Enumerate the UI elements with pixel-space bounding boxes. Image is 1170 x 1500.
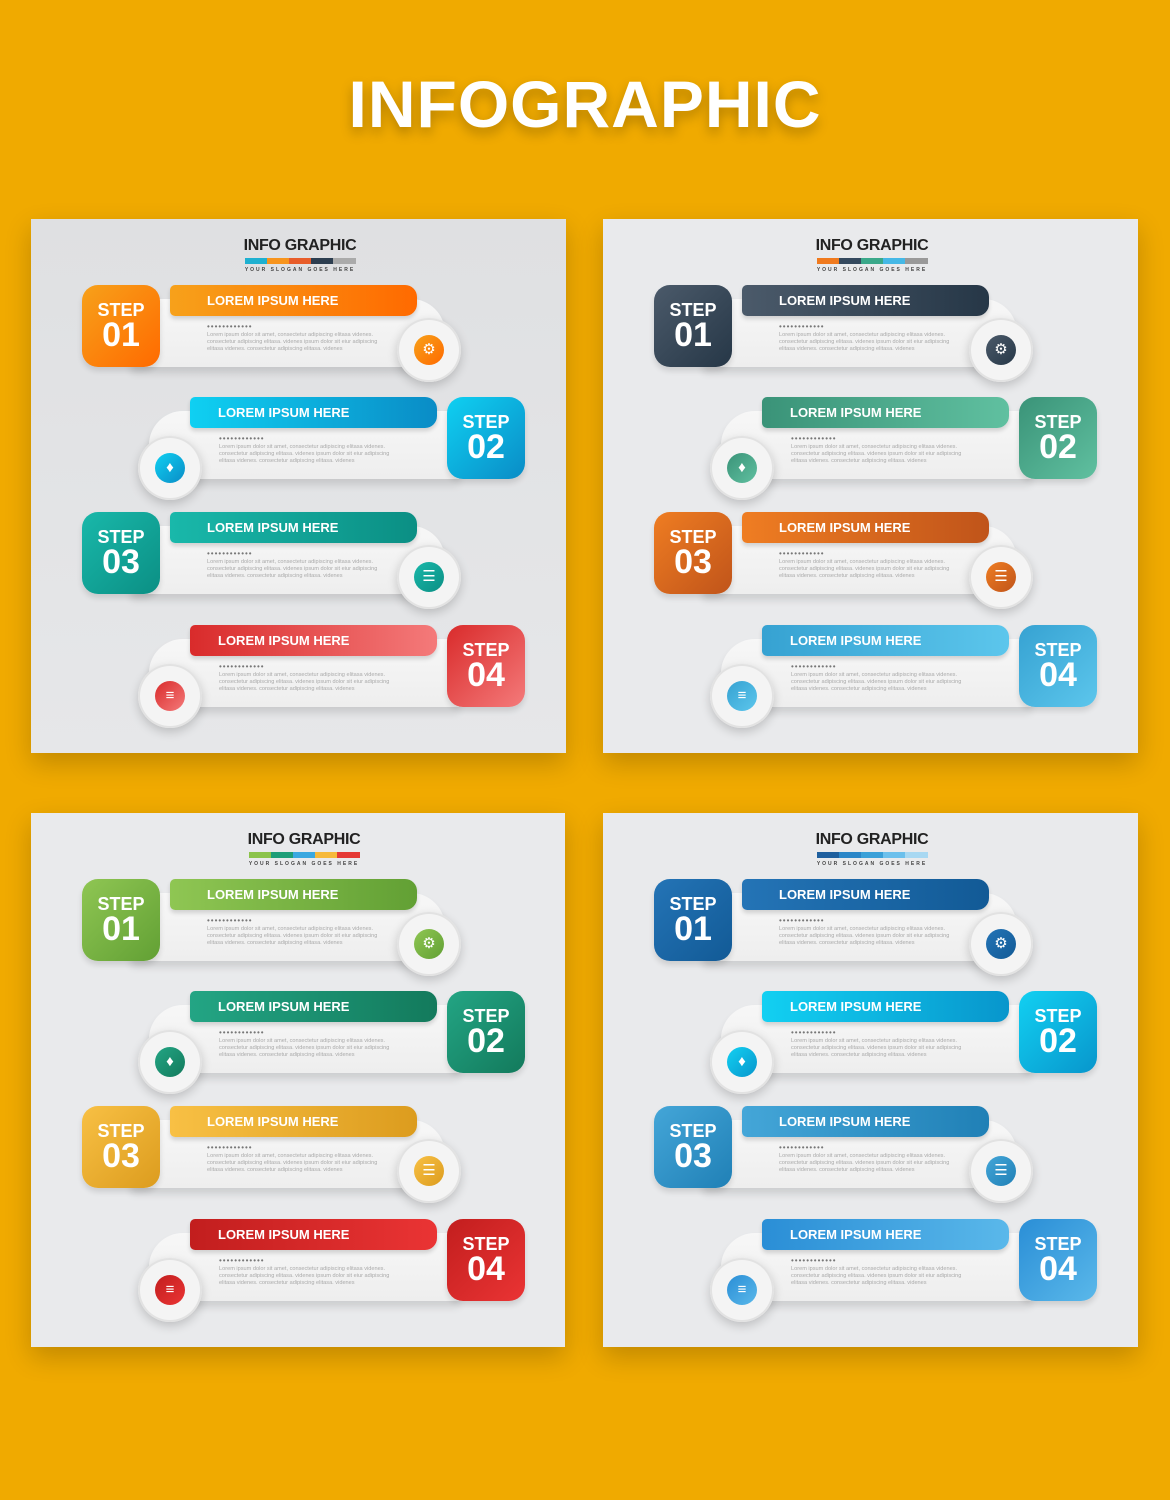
panel heading: INFO GRAPHIC	[816, 831, 928, 848]
step 02: 02	[467, 1022, 505, 1060]
step 04: LOREM IPSUM HERE	[790, 633, 921, 648]
step 01: STEP	[669, 300, 716, 320]
step 04: Lorem ipsum dolor sit amet, consectetur adipiscing elitasa videnes. consectetur adipiscing elitasa. videnes ipsum dolor sit eiur adipiscing elitasa videnes. consectetur adipiscing elitasa. videnes	[791, 1266, 961, 1286]
step 02	[134, 397, 526, 508]
panel heading: YOUR SLOGAN GOES HERE	[817, 861, 927, 867]
step 04: STEP	[1034, 1234, 1082, 1254]
step 02: ••••••••••••	[219, 434, 265, 443]
step 03: ••••••••••••	[207, 549, 253, 558]
step 04: LOREM IPSUM HERE	[218, 633, 349, 648]
step 04	[706, 1219, 1098, 1330]
step 02: ♦	[166, 1053, 174, 1070]
step 01: ⚙	[994, 341, 1008, 358]
step 01: ⚙	[422, 935, 436, 952]
panel: bottom-left green set	[31, 813, 565, 1347]
step 01: ••••••••••••	[779, 322, 825, 331]
step 03: LOREM IPSUM HERE	[207, 1114, 338, 1129]
panel heading: INFO GRAPHIC	[248, 831, 360, 848]
step 03: STEP	[669, 1121, 716, 1141]
step 03: Lorem ipsum dolor sit amet, consectetur adipiscing elitasa videnes. consectetur adipiscing elitasa. videnes ipsum dolor sit eiur adipiscing elitasa videnes. consectetur adipiscing elitasa. videnes	[779, 559, 949, 579]
step 04: STEP	[1034, 640, 1082, 660]
step 02: Lorem ipsum dolor sit amet, consectetur adipiscing elitasa videnes. consectetur adipiscing elitasa. videnes ipsum dolor sit eiur adipiscing elitasa videnes. consectetur adipiscing elitasa. videnes	[791, 1038, 961, 1058]
step 03: ☰	[422, 568, 436, 585]
step 04: ••••••••••••	[791, 1256, 837, 1265]
step 03	[652, 1106, 1037, 1211]
step 04: STEP	[462, 640, 510, 660]
step 04: 04	[1039, 656, 1077, 694]
step 03	[80, 512, 465, 617]
panel heading: INFO GRAPHIC	[816, 237, 928, 254]
step 04: ••••••••••••	[219, 1256, 265, 1265]
step 02	[706, 397, 1098, 508]
step 01	[80, 879, 465, 984]
step 02: ••••••••••••	[791, 434, 837, 443]
step 01: ⚙	[994, 935, 1008, 952]
step 03: 03	[102, 1137, 140, 1175]
step 04: ≡	[738, 687, 746, 704]
step 02: ••••••••••••	[219, 1028, 265, 1037]
step 02: Lorem ipsum dolor sit amet, consectetur adipiscing elitasa videnes. consectetur adipiscing elitasa. videnes ipsum dolor sit eiur adipiscing elitasa videnes. consectetur adipiscing elitasa. videnes	[219, 1038, 389, 1058]
step 02: ♦	[166, 459, 174, 476]
panel heading: INFO GRAPHIC	[244, 237, 356, 254]
panel: top-left orange set	[31, 219, 566, 753]
step 03: ••••••••••••	[207, 1143, 253, 1152]
step 02: LOREM IPSUM HERE	[790, 999, 921, 1014]
step 02: 02	[1039, 1022, 1077, 1060]
step 04: 04	[1039, 1250, 1077, 1288]
step 01: LOREM IPSUM HERE	[779, 887, 910, 902]
step 04	[134, 625, 526, 736]
step 01: 01	[102, 316, 140, 354]
panel heading	[816, 831, 928, 867]
step 04: ≡	[738, 1281, 746, 1298]
step 04	[706, 625, 1098, 736]
step 02: STEP	[462, 412, 510, 432]
step 01: Lorem ipsum dolor sit amet, consectetur adipiscing elitasa videnes. consectetur adipiscing elitasa. videnes ipsum dolor sit eiur adipiscing elitasa videnes. consectetur adipiscing elitasa. videnes	[779, 926, 949, 946]
step 04: 04	[467, 1250, 505, 1288]
panel heading: YOUR SLOGAN GOES HERE	[817, 267, 927, 273]
step 02: ••••••••••••	[791, 1028, 837, 1037]
step 01: Lorem ipsum dolor sit amet, consectetur adipiscing elitasa videnes. consectetur adipiscing elitasa. videnes ipsum dolor sit eiur adipiscing elitasa videnes. consectetur adipiscing elitasa. videnes	[779, 332, 949, 352]
step 04: 04	[467, 656, 505, 694]
step 02: ♦	[738, 459, 746, 476]
step 03: LOREM IPSUM HERE	[779, 520, 910, 535]
step 01: 01	[674, 910, 712, 948]
panel heading: YOUR SLOGAN GOES HERE	[245, 267, 355, 273]
step 02: ♦	[738, 1053, 746, 1070]
panel heading: YOUR SLOGAN GOES HERE	[249, 861, 359, 867]
step 04: Lorem ipsum dolor sit amet, consectetur adipiscing elitasa videnes. consectetur adipiscing elitasa. videnes ipsum dolor sit eiur adipiscing elitasa videnes. consectetur adipiscing elitasa. videnes	[219, 1266, 389, 1286]
step 03: STEP	[669, 527, 716, 547]
panel: bottom-right blue set	[603, 813, 1138, 1347]
step 03: 03	[102, 543, 140, 581]
step 04: ••••••••••••	[219, 662, 265, 671]
step 01: ••••••••••••	[779, 916, 825, 925]
step 01	[652, 879, 1037, 984]
step 04: ≡	[166, 687, 174, 704]
step 03: ••••••••••••	[779, 1143, 825, 1152]
step 04: LOREM IPSUM HERE	[218, 1227, 349, 1242]
step 03: 03	[674, 1137, 712, 1175]
step 03: ☰	[994, 1162, 1008, 1179]
step 04: ≡	[166, 1281, 174, 1298]
step 01: ••••••••••••	[207, 322, 253, 331]
step 04: STEP	[462, 1234, 510, 1254]
step 01	[80, 285, 465, 390]
step 03: STEP	[97, 1121, 144, 1141]
step 01	[652, 285, 1037, 390]
step 01: ⚙	[422, 341, 436, 358]
step 02	[706, 991, 1098, 1102]
step 02: 02	[1039, 428, 1077, 466]
step 01: Lorem ipsum dolor sit amet, consectetur adipiscing elitasa videnes. consectetur adipiscing elitasa. videnes ipsum dolor sit eiur adipiscing elitasa videnes. consectetur adipiscing elitasa. videnes	[207, 926, 377, 946]
step 03: ☰	[994, 568, 1008, 585]
step 02: Lorem ipsum dolor sit amet, consectetur adipiscing elitasa videnes. consectetur adipiscing elitasa. videnes ipsum dolor sit eiur adipiscing elitasa videnes. consectetur adipiscing elitasa. videnes	[219, 444, 389, 464]
step 03	[80, 1106, 465, 1211]
step 04	[134, 1219, 526, 1330]
step 02	[134, 991, 526, 1102]
step 01: LOREM IPSUM HERE	[207, 293, 338, 308]
step 04: Lorem ipsum dolor sit amet, consectetur adipiscing elitasa videnes. consectetur adipiscing elitasa. videnes ipsum dolor sit eiur adipiscing elitasa videnes. consectetur adipiscing elitasa. videnes	[219, 672, 389, 692]
step 03: ☰	[422, 1162, 436, 1179]
step 03: Lorem ipsum dolor sit amet, consectetur adipiscing elitasa videnes. consectetur adipiscing elitasa. videnes ipsum dolor sit eiur adipiscing elitasa videnes. consectetur adipiscing elitasa. videnes	[207, 1153, 377, 1173]
step 03	[652, 512, 1037, 617]
step 04: LOREM IPSUM HERE	[790, 1227, 921, 1242]
step 03: STEP	[97, 527, 144, 547]
panel heading	[816, 237, 928, 273]
step 02: Lorem ipsum dolor sit amet, consectetur adipiscing elitasa videnes. consectetur adipiscing elitasa. videnes ipsum dolor sit eiur adipiscing elitasa videnes. consectetur adipiscing elitasa. videnes	[791, 444, 961, 464]
step 03: LOREM IPSUM HERE	[207, 520, 338, 535]
step 01: LOREM IPSUM HERE	[207, 887, 338, 902]
step 02: STEP	[1034, 412, 1082, 432]
step 03: 03	[674, 543, 712, 581]
panel: top-right dark/teal set	[603, 219, 1138, 753]
step 01: STEP	[97, 300, 144, 320]
step 02: LOREM IPSUM HERE	[790, 405, 921, 420]
step 01: ••••••••••••	[207, 916, 253, 925]
step 03: LOREM IPSUM HERE	[779, 1114, 910, 1129]
step 02: STEP	[462, 1006, 510, 1026]
step 01: LOREM IPSUM HERE	[779, 293, 910, 308]
step 02: 02	[467, 428, 505, 466]
step 03: Lorem ipsum dolor sit amet, consectetur adipiscing elitasa videnes. consectetur adipiscing elitasa. videnes ipsum dolor sit eiur adipiscing elitasa videnes. consectetur adipiscing elitasa. videnes	[207, 559, 377, 579]
step 03: ••••••••••••	[779, 549, 825, 558]
step 01: 01	[674, 316, 712, 354]
step 04: ••••••••••••	[791, 662, 837, 671]
step 02: LOREM IPSUM HERE	[218, 999, 349, 1014]
step 01: Lorem ipsum dolor sit amet, consectetur adipiscing elitasa videnes. consectetur adipiscing elitasa. videnes ipsum dolor sit eiur adipiscing elitasa videnes. consectetur adipiscing elitasa. videnes	[207, 332, 377, 352]
step 01: STEP	[669, 894, 716, 914]
step 01: STEP	[97, 894, 144, 914]
panel heading	[248, 831, 360, 867]
step 03: Lorem ipsum dolor sit amet, consectetur adipiscing elitasa videnes. consectetur adipiscing elitasa. videnes ipsum dolor sit eiur adipiscing elitasa videnes. consectetur adipiscing elitasa. videnes	[779, 1153, 949, 1173]
panel heading	[244, 237, 356, 273]
step 04: Lorem ipsum dolor sit amet, consectetur adipiscing elitasa videnes. consectetur adipiscing elitasa. videnes ipsum dolor sit eiur adipiscing elitasa videnes. consectetur adipiscing elitasa. videnes	[791, 672, 961, 692]
step 01: 01	[102, 910, 140, 948]
step 02: STEP	[1034, 1006, 1082, 1026]
step 02: LOREM IPSUM HERE	[218, 405, 349, 420]
title: INFOGRAPHIC	[348, 67, 822, 141]
